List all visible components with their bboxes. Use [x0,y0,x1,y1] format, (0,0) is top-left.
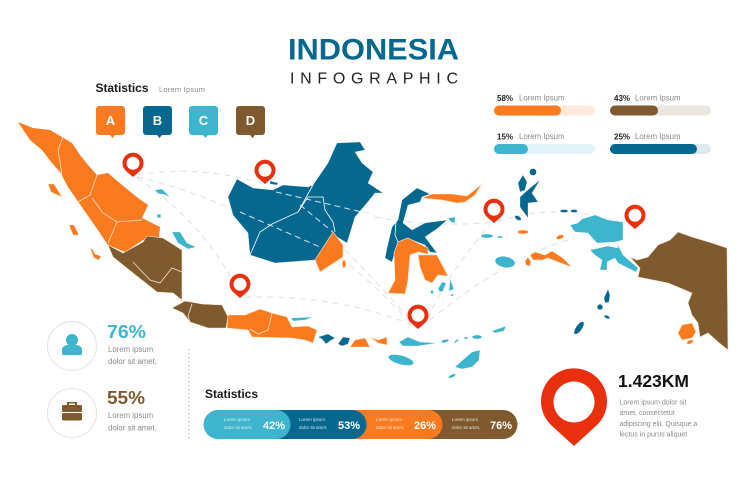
stat: 55%: dolor sit amet, [108,424,157,432]
legend: statistics A B C D [96,81,265,138]
Java and Lesser Sunda [172,301,506,379]
legend: statistics A B C D: B [153,113,162,128]
segmented statistics bar: 76% [490,420,512,432]
legend: statistics A B C D: D [246,113,255,128]
segmented statistics bar: dolor sit amet, [452,425,480,430]
progress bars: Lorem Ipsum [635,132,680,141]
map of Indonesia [18,122,728,379]
progress bars: 58% [497,94,513,103]
segmented statistics bar: Lorem ipsum [376,417,402,422]
progress bars: 15% [497,132,513,142]
segmented statistics bar: 26% [414,420,436,432]
distance callout: Lorem ipsum dolor sit [620,400,686,406]
statistics heading: Statistics [205,387,258,401]
progress bars [494,94,711,154]
Sumatra [18,122,196,300]
segmented statistics bar: dolor sit amet, [376,425,404,430]
segmented statistics bar: 53% [338,420,360,432]
Papua [570,215,728,350]
legend: statistics A B C D: C [199,113,209,128]
progress bars: 25% [614,132,630,142]
Sulawesi [385,184,482,296]
title: INDONESIA [288,34,459,66]
distance callout [618,371,697,438]
progress bars: Lorem Ipsum [519,132,564,141]
distance callout: adipiscing elit. Quisque a [620,421,697,428]
segmented statistics bar [204,410,518,439]
legend: statistics A B C D: Statistics [96,81,149,95]
title [288,34,459,88]
segmented statistics bar: Lorem ipsum [224,417,250,422]
segmented statistics bar: Lorem ipsum [452,417,478,422]
stat: 76%: dolor sit amet, [108,357,157,366]
Maluku [481,168,578,269]
segmented statistics bar: dolor sit amet, [299,425,327,430]
distance callout: lectus in purus aliquet [620,432,687,438]
Borneo [228,142,383,272]
segmented statistics bar: 42% [263,420,285,432]
distance callout: amet, consectetur [620,410,676,417]
big location pin [541,368,607,446]
progress bars: Lorem Ipsum [635,94,680,102]
stat: 76%: 76% [107,322,146,342]
legend: statistics A B C D: A [106,113,116,128]
route lines [137,171,632,329]
stat: 55% [48,388,157,438]
stat: 55%: Lorem ipsum [108,411,153,420]
distance callout: 1.423KM [618,371,689,391]
segmented statistics bar: dolor sit amet, [224,425,252,430]
legend: statistics A B C D: Lorem Ipsum [159,85,205,94]
stat: 55%: 55% [107,388,145,408]
icon: person [48,322,96,370]
icon: briefcase [48,388,96,438]
stat: 76%: Lorem ipsum [108,345,153,354]
title: INFOGRAPHIC [290,70,458,88]
progress bars: 43% [614,94,630,103]
segmented statistics bar: Lorem ipsum [299,417,325,422]
stat: 76% [48,322,157,370]
progress bars: Lorem Ipsum [519,94,564,102]
location pins [123,153,646,329]
